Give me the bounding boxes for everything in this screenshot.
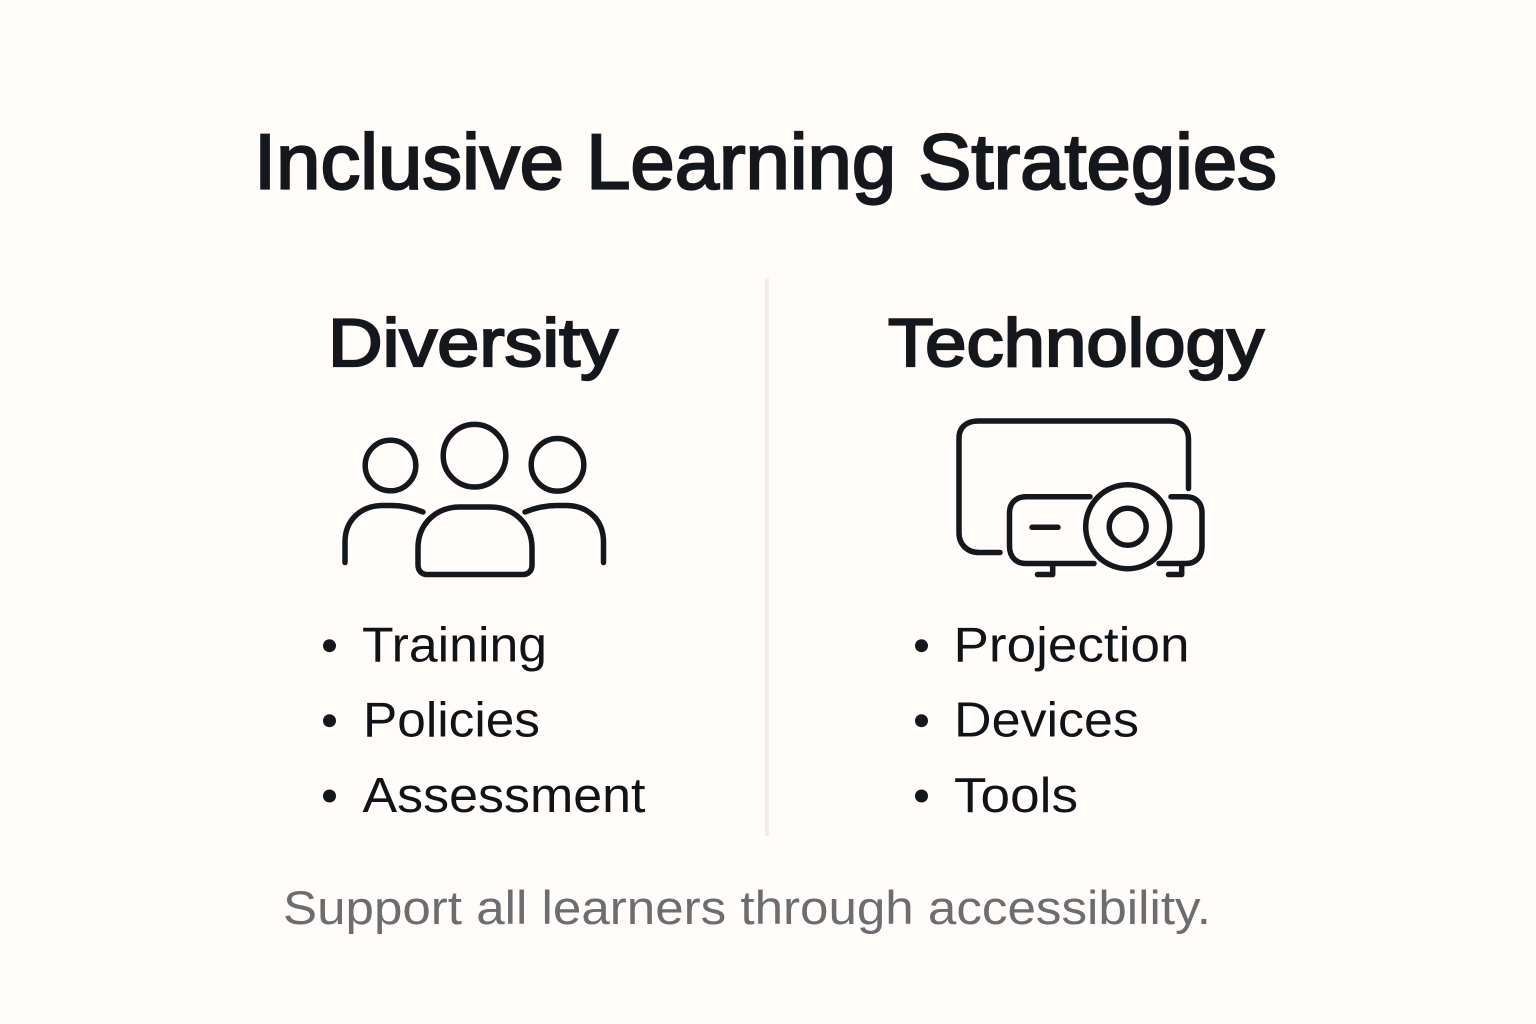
title: Inclusive Learning Strategies [254, 118, 1277, 206]
icon: projector and screen [959, 421, 1202, 574]
icon: group of people [345, 424, 604, 574]
footer tagline: Support all learners through accessibility. [283, 881, 1211, 934]
list: diversity items: Assessment [362, 769, 646, 823]
list: technology items: Devices [954, 694, 1139, 748]
panel: diversity [323, 305, 646, 823]
divider between columns [765, 278, 769, 836]
list: diversity items [323, 619, 646, 823]
list: technology items [915, 619, 1190, 823]
heading: technology: Technology [888, 305, 1264, 381]
heading: diversity: Diversity [328, 305, 618, 381]
list: diversity items: Policies [363, 694, 540, 748]
list: technology items: Projection [954, 619, 1190, 673]
list: diversity items: Training [362, 619, 547, 673]
list: technology items: Tools [954, 769, 1078, 823]
panel: technology [888, 305, 1264, 823]
